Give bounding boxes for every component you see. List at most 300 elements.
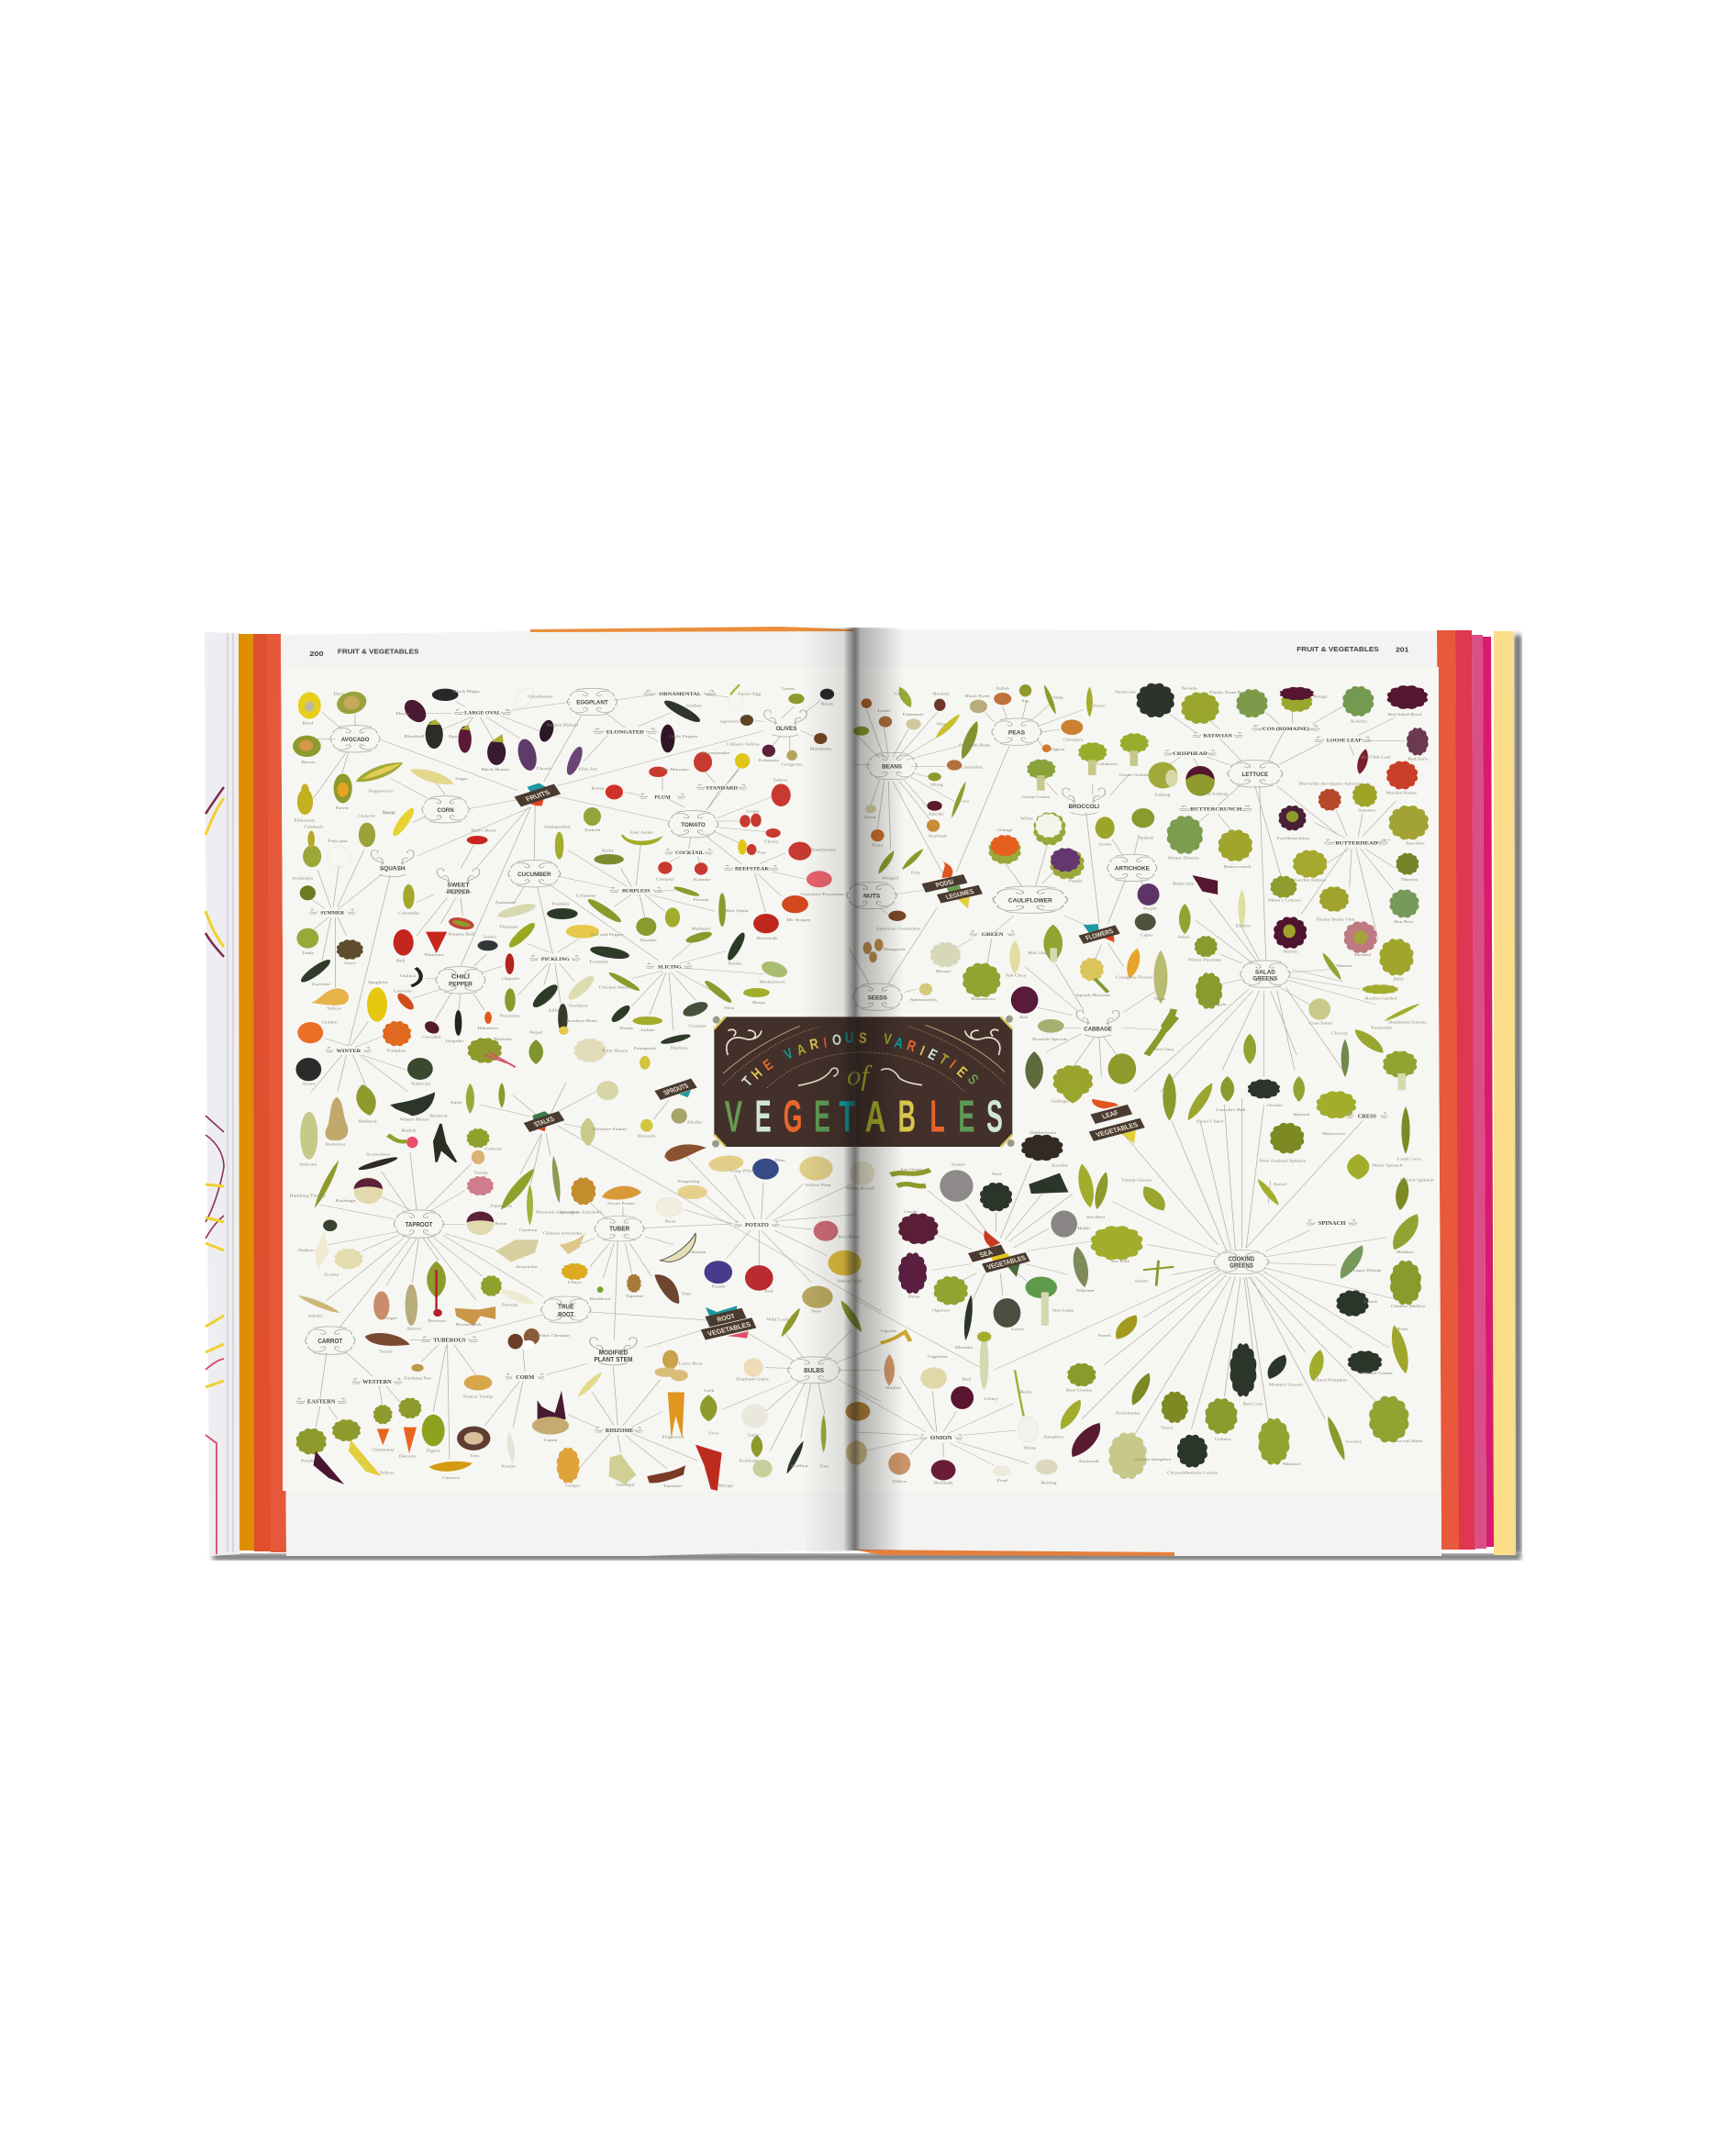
potato group: Yukon Gold xyxy=(836,1280,862,1284)
cucumber group: Armenian xyxy=(495,902,517,906)
open pages xyxy=(281,627,1441,1556)
plaque title: the various varieties: O xyxy=(831,1032,842,1049)
cucumber group: Fountain xyxy=(589,961,608,964)
ribbon: pods and legumes: PODS/ xyxy=(934,878,955,889)
beans group: Cannellini xyxy=(961,766,984,770)
beans group: Edamame xyxy=(903,714,924,717)
sea vegetables group: Ogonori xyxy=(932,1309,951,1313)
corm and rhizome group: Canna xyxy=(544,1439,558,1443)
true root, tuberous and carrot group: Yellow xyxy=(379,1472,395,1475)
ribbon: root vegetables xyxy=(692,1298,760,1347)
taproot group: Celeriac xyxy=(485,1148,504,1151)
plaque title: the various varieties: S xyxy=(858,1030,867,1047)
cooking greens group: Land Cress xyxy=(1397,1158,1421,1161)
eggplant group: Easter Egg xyxy=(738,693,762,696)
true root, tuberous and carrot group: Cassava xyxy=(442,1477,461,1481)
stalks vegetables, upper part: Nopal xyxy=(529,1031,543,1035)
plaque title: the various varieties: V xyxy=(782,1045,796,1063)
sprouts vegetables: Brussels xyxy=(638,1135,656,1139)
potato group: Blue xyxy=(775,1159,786,1163)
tomato group: Campari xyxy=(656,878,674,882)
avocado group: Pinkerton xyxy=(294,819,315,823)
salad greens group: Radicchio xyxy=(1173,883,1195,886)
bulbs group: Garlic xyxy=(747,1434,762,1438)
olives group: Kalamata xyxy=(759,760,780,763)
bulbs group: Scallion xyxy=(791,1464,808,1469)
salad greens group: Endive xyxy=(1236,925,1252,928)
tuber group: Chinese Artichoke xyxy=(543,1232,583,1236)
running header left: FRUIT & VEGETABLES xyxy=(338,648,418,655)
lettuce group: Rouge xyxy=(1314,695,1329,699)
lettuce group: Mythic xyxy=(1283,950,1299,954)
lettuce group xyxy=(1115,683,1429,982)
cooking greens group: COOKING xyxy=(1229,1255,1254,1262)
onion group: White xyxy=(1023,1447,1037,1450)
cooking greens group: Spinach xyxy=(1293,1114,1310,1117)
olives group: OLIVES xyxy=(775,725,797,732)
potato group: New xyxy=(811,1310,821,1314)
tomato group: STANDARD xyxy=(706,784,738,791)
taproot group: Turnip xyxy=(473,1172,488,1175)
cucumber group: Northern xyxy=(569,1005,588,1008)
squash group xyxy=(292,807,530,1092)
lettuce group: Red Oak Leaf xyxy=(1361,756,1391,760)
cooking greens group: CRESS xyxy=(1358,1113,1376,1119)
plaque title: vegetables: E xyxy=(755,1092,772,1141)
lettuce group: Nevada xyxy=(1181,687,1198,691)
peas, nuts and seeds group: Indian xyxy=(996,687,1010,691)
peas, nuts and seeds group: Pigeon xyxy=(1051,749,1065,752)
ribbon: pods and legumes xyxy=(914,856,987,916)
broccoli and cauliflower group: Caper xyxy=(1141,934,1153,938)
lettuce group: BUTTERHEAD xyxy=(1335,839,1377,846)
sea vegetables group: Dulse xyxy=(907,1295,921,1299)
plaque title: the various varieties: I xyxy=(946,1057,959,1072)
cucumber group: Conister xyxy=(689,1025,707,1028)
edible flowers and cabbage group: CABBAGE xyxy=(1084,1026,1112,1032)
potato group xyxy=(656,1144,874,1314)
cucumber group: Alibi xyxy=(548,1009,560,1013)
stalks vegetables, upper part: Palm Hearts xyxy=(602,1050,628,1053)
cucumber group: Marketer xyxy=(692,928,711,931)
tomato group: Yellow xyxy=(773,779,788,783)
corm and rhizome group: Taro xyxy=(470,1454,480,1458)
winter squash continuation: Delicata xyxy=(299,1163,317,1167)
edible flowers and cabbage group: Courgette Flower xyxy=(1116,976,1153,980)
tuber group: Mashua xyxy=(689,1251,707,1255)
olives group: Black xyxy=(821,703,834,706)
tomato group: Lillian's Yellow xyxy=(727,743,761,747)
cucumber group: Pushkin xyxy=(552,903,570,906)
lettuce group: Nanticoke xyxy=(1115,691,1137,695)
sea vegetables group: Mozuku xyxy=(955,1347,974,1350)
sea vegetables group: Nori xyxy=(992,1173,1002,1177)
taproot group: Beetroot xyxy=(428,1320,447,1324)
cucumber group: Marlene xyxy=(671,1047,689,1050)
ribbon: fruits: FRUITS xyxy=(524,788,551,803)
cooking greens group: Swiss Chard xyxy=(1196,1120,1224,1124)
eggplant group: Ichiban xyxy=(686,705,703,708)
peppers group: SWEET xyxy=(448,882,469,888)
stalks vegetables, upper part: Rhubarb xyxy=(494,1039,512,1042)
peppers group: Bull's-Horn xyxy=(471,829,496,833)
cooking greens group: Golden Samphire xyxy=(1134,1458,1172,1462)
plaque title: the various varieties: H xyxy=(749,1065,766,1084)
squash group: Golden xyxy=(322,1021,338,1025)
cooking greens group: Malabar xyxy=(1396,1251,1414,1255)
corm and rhizome group: Ginger xyxy=(565,1484,581,1488)
beans group: Pole xyxy=(911,872,921,875)
salad greens group: Puntarelle xyxy=(1371,1027,1394,1030)
cooking greens group: Sorrel xyxy=(1274,1184,1287,1187)
cucumber group: BURPLESS xyxy=(622,888,651,894)
squash group: Zucchini xyxy=(312,984,331,987)
lettuce group: Flashy Butter Oak xyxy=(1316,918,1355,922)
running header right: 201 xyxy=(1396,646,1408,653)
tomato group: COCKTAIL xyxy=(675,850,705,856)
stalks group: Asparagus xyxy=(490,1205,512,1208)
taproot group: Radish xyxy=(401,1129,417,1133)
taproot group: Arracacha xyxy=(516,1266,538,1270)
plaque title: the various varieties: E xyxy=(761,1057,776,1074)
peppers group: Jalapeño xyxy=(445,1040,464,1044)
avocado group xyxy=(293,688,518,823)
peas, nuts and seeds group: American Groundnut xyxy=(875,928,921,931)
corn group: Sweet xyxy=(383,811,396,815)
avocado group: Bacon xyxy=(302,761,316,765)
edible flowers and cabbage group: Squash Blossom xyxy=(1075,995,1110,998)
corm and rhizome group: Lotus Root xyxy=(679,1362,703,1366)
squash group: Sweet xyxy=(383,812,396,816)
plaque title: the various varieties: E xyxy=(925,1046,940,1064)
stalks vegetables, upper part xyxy=(468,1031,657,1070)
panel: upper left, fruits xyxy=(292,648,845,1092)
tuber group: Ulluco xyxy=(567,1281,583,1284)
cooking greens group: Chrysanthemum Leaves xyxy=(1167,1472,1218,1475)
true root, tuberous and carrot group: WESTERN xyxy=(362,1379,393,1385)
potato group: White Round xyxy=(846,1187,874,1191)
onion group: ONION xyxy=(930,1435,953,1441)
cooking greens group: Mustard Greens xyxy=(1269,1384,1303,1387)
broccoli and cauliflower group: Orange xyxy=(997,829,1013,833)
taproot group: Salsify xyxy=(308,1315,324,1318)
cooking greens group: Ceylon Spinach xyxy=(1400,1179,1434,1183)
taproot group: TAPROOT xyxy=(406,1220,432,1228)
edible flowers and cabbage group: Brussels Sprouts xyxy=(1032,1039,1068,1042)
cooking greens group: Gochoy xyxy=(1345,1440,1363,1444)
cooking greens group: Chinese Mallow xyxy=(1391,1306,1426,1309)
tomato group: Beefsteak xyxy=(757,938,778,941)
onion group: Shallot xyxy=(885,1387,901,1391)
taproot group: Parsnip xyxy=(502,1304,518,1307)
lettuce group: Mottled Butter xyxy=(1386,792,1418,795)
beans group: Adzuki xyxy=(929,813,944,817)
cucumber group: PICKLING xyxy=(541,956,570,962)
plaque title: vegetables: L xyxy=(929,1092,945,1141)
plaque title: vegetables: S xyxy=(986,1092,1003,1141)
plaque title: vegetables: A xyxy=(865,1091,885,1141)
corm and rhizome group: RHIZOME xyxy=(606,1428,634,1434)
peppers group: Banana Bell xyxy=(449,933,475,937)
stalks group: Florence Fennel xyxy=(593,1128,628,1132)
panel: lower left, stalks and root vegetables xyxy=(289,1078,881,1491)
peas, nuts and seeds group: Black Eyed xyxy=(965,695,990,699)
cucumber group: Lebanese xyxy=(576,895,596,898)
corm and rhizome group: Myoga xyxy=(718,1484,734,1488)
winter squash continuation: Hubbard xyxy=(358,1120,377,1124)
broccoli and cauliflower group: Green Goliath xyxy=(1119,774,1150,778)
broccoli and cauliflower group: Spiked xyxy=(1139,837,1153,840)
plaque title: vegetables: G xyxy=(784,1092,802,1141)
beans group: Pinto xyxy=(872,844,884,848)
onion group: Yellow xyxy=(892,1481,907,1484)
panel: upper right, pods, flowers and salad greens xyxy=(847,646,1429,1096)
lettuce group: BUTTERCRUNCH xyxy=(1190,806,1242,812)
running header left xyxy=(309,648,418,658)
cucumber group: Adalaparken xyxy=(544,826,571,829)
taproot group xyxy=(289,1115,544,1331)
plaque title: vegetables: B xyxy=(898,1092,916,1141)
true root, tuberous and carrot group xyxy=(296,1296,707,1484)
cucumber group: East Asian xyxy=(630,831,653,835)
olives group: Mandsaha xyxy=(809,748,832,751)
left page edge stripes xyxy=(239,634,286,1552)
eggplant group: ORNAMENTAL xyxy=(659,691,701,697)
broccoli and cauliflower group: Purple xyxy=(1143,907,1158,911)
stalks vegetables, upper part: Fenugreek xyxy=(634,1048,657,1051)
corm and rhizome group: Fingerroot xyxy=(662,1436,684,1439)
cucumber group: Parades xyxy=(640,939,657,943)
salad greens group: Corn Salad xyxy=(1308,1022,1333,1026)
edible flowers and cabbage group: Tea Choy xyxy=(1154,1049,1174,1052)
lettuce group: Kolchic xyxy=(1351,720,1368,724)
taproot group: Rutabaga xyxy=(336,1200,356,1204)
tuber group: Breadroot xyxy=(590,1297,611,1301)
cucumber group: Chicken Waist xyxy=(599,986,630,990)
onion group: Cipolla xyxy=(881,1329,897,1333)
cucumber group: Burpy xyxy=(752,1002,766,1006)
corm and rhizome group: Water Chestnut xyxy=(538,1334,571,1339)
corm and rhizome group: Galangal xyxy=(616,1484,635,1487)
potato group: Yellow Finn xyxy=(805,1184,831,1188)
corn group: CORN xyxy=(438,806,454,814)
corm and rhizome group: PLANT STEM xyxy=(594,1355,632,1363)
true root, tuberous and carrot group: Prairie Turnip xyxy=(463,1395,494,1399)
peas, nuts and seeds group: Chickpea xyxy=(1063,739,1084,742)
plaque title: the various varieties: E xyxy=(953,1064,970,1082)
ribbon: stalks xyxy=(521,1107,567,1136)
peppers group: Cascabel xyxy=(422,1036,441,1039)
avocado group: Fuerte xyxy=(335,807,350,811)
taproot group: Daikon xyxy=(298,1250,314,1253)
cucumber group: Bourbon Beast xyxy=(566,1020,598,1024)
stalks group: Anise xyxy=(450,1101,463,1106)
tomato group: Moneymaker xyxy=(702,752,730,756)
peppers group: Habanero xyxy=(477,1028,498,1031)
plaque scrollwork xyxy=(727,1029,1000,1085)
avocado group: AVOCADO xyxy=(341,736,370,743)
peppers group: PEPPER xyxy=(447,888,470,895)
sea vegetables group: Wakame xyxy=(1076,1289,1095,1293)
beans group: Lentil xyxy=(878,710,891,714)
lettuce group: BATAVIAN xyxy=(1203,733,1232,739)
cooking greens group: Galluga xyxy=(1052,1100,1069,1104)
sprouts vegetables xyxy=(638,1100,702,1139)
sea vegetables group: Sea Grape xyxy=(1052,1309,1074,1313)
broccoli and cauliflower group: Mosaic xyxy=(936,971,952,974)
broccoli and cauliflower group: CAULIFLOWER xyxy=(1008,897,1052,904)
tomato group: Cherry xyxy=(764,840,779,844)
cooking greens group: Watercress xyxy=(1322,1132,1345,1136)
plaque corner ornaments xyxy=(712,1016,1015,1148)
broccoli and cauliflower group: Green Comet xyxy=(1022,796,1051,800)
lettuce group: CRISPHEAD xyxy=(1173,750,1208,757)
peppers group: PEPPER xyxy=(449,981,473,987)
beans group: Borlotti xyxy=(933,693,950,696)
ribbon: sprouts xyxy=(654,1078,701,1106)
squash group: SQUASH xyxy=(380,865,406,872)
cucumber group: Kirby xyxy=(602,850,615,853)
plaque title: the various varieties: V xyxy=(883,1031,893,1049)
sea vegetables group: Arame xyxy=(951,1163,966,1167)
right page edge stripes xyxy=(1437,630,1516,1555)
true root, tuberous and carrot group: TRUE xyxy=(558,1303,574,1310)
bulbs group: BULBS xyxy=(804,1366,824,1374)
lettuce group: Iceberg xyxy=(1154,794,1171,797)
eggplant group: Slim Jim xyxy=(578,768,597,772)
onion group: Celery xyxy=(985,1398,998,1402)
bulbs group: Kohlrabi xyxy=(740,1460,759,1463)
squash group: Patty pan xyxy=(328,840,348,844)
peas, nuts and seeds group xyxy=(847,684,1106,1010)
ribbon: sea vegetables xyxy=(960,1223,1035,1285)
tomato group: Kumato xyxy=(694,879,711,883)
cucumber group: Persian xyxy=(694,899,709,903)
cooking greens group: Komatsuna xyxy=(1116,1412,1141,1416)
winter squash continuation: Winter Melon xyxy=(400,1118,429,1122)
cooking greens group: New Zealand Spinach xyxy=(1260,1160,1307,1163)
eggplant group: Ghostbuster xyxy=(528,695,553,699)
book spine shadow xyxy=(800,628,904,1554)
squash group: Tinda xyxy=(302,952,315,956)
squash group: Yellow xyxy=(327,1007,342,1011)
sea vegetables group: Dabberlocks xyxy=(1029,1132,1056,1136)
cooking greens group: Water Spinach xyxy=(1372,1164,1403,1168)
beans group xyxy=(853,685,991,881)
olives group: Agrinion xyxy=(719,720,740,724)
tuber group: Tigernut xyxy=(626,1295,644,1299)
cucumber group: Diamant xyxy=(500,926,518,929)
taproot group: Beets xyxy=(495,1223,506,1227)
cucumber group: Tronchi xyxy=(584,829,601,833)
corn group xyxy=(351,758,518,838)
peppers group: Pimiento xyxy=(425,954,444,958)
squash group: SUMMER xyxy=(320,909,345,916)
peppers group: Cayenne xyxy=(394,990,413,994)
tomato group: Mr. Stripey xyxy=(786,919,811,923)
olives group: Green xyxy=(782,688,795,692)
beans group: Soybean xyxy=(929,835,947,839)
avocado group: Reed xyxy=(302,722,314,726)
cucumber group: Marketmore xyxy=(759,981,786,984)
cucumber group: Wautoma xyxy=(500,1015,520,1018)
cooking greens group: Broccoli Rabe xyxy=(1392,1439,1423,1444)
broccoli and cauliflower group: Calabrese xyxy=(1096,763,1118,767)
cooking greens group: Sorrel xyxy=(1135,1280,1149,1284)
eggplant group: Ebony xyxy=(395,713,410,717)
stalks group xyxy=(450,1081,881,1311)
corm and rhizome group: Konjac xyxy=(501,1465,518,1469)
cucumber group: Salt and Pepper xyxy=(591,934,624,938)
eggplant group: EGGPLANT xyxy=(576,699,608,706)
cooking greens group: Turnip Greens xyxy=(1121,1179,1152,1183)
squash group: WINTER xyxy=(336,1048,362,1054)
ribbon: flowers xyxy=(1074,917,1124,950)
cooking greens group xyxy=(994,1073,1434,1479)
cooking greens group: Celtuce xyxy=(1215,1438,1232,1441)
onion group: Red xyxy=(963,1378,972,1382)
beans group: Winged xyxy=(882,877,899,881)
bulbs group: Wild Leek xyxy=(766,1318,789,1322)
eggplant group: Black Magic xyxy=(453,691,481,695)
lettuce group: Red Sails xyxy=(1408,758,1428,761)
onion group: Cippolini xyxy=(928,1355,948,1359)
ribbon: stalks: STALKS xyxy=(532,1115,556,1128)
plaque title: the various varieties: R xyxy=(808,1036,820,1054)
plaque title: the various varieties: U xyxy=(845,1030,853,1047)
peppers group: Jimbo xyxy=(483,936,496,939)
onion group: Boiler xyxy=(1019,1391,1033,1395)
plaque title: the various varieties: I xyxy=(918,1043,927,1060)
peppers group: Bell xyxy=(396,960,406,963)
sea vegetables group: Sea Grape xyxy=(900,1169,923,1172)
tomato group: TOMATO xyxy=(681,821,706,828)
edible flowers and cabbage group: Napa xyxy=(1154,998,1166,1002)
squash group: Chayote xyxy=(358,815,376,818)
tomato group: Costoluto Fiorentino xyxy=(800,894,845,897)
eggplant group: Epic xyxy=(449,736,459,739)
peppers group: Chilaca xyxy=(400,975,417,979)
eggplant group: ELONGATED xyxy=(607,728,644,735)
potato group: Rose xyxy=(665,1220,676,1224)
plaque title: the various varieties: A xyxy=(795,1041,808,1060)
corm and rhizome group xyxy=(457,1328,734,1491)
beans group: BEANS xyxy=(882,763,902,770)
ribbon: root vegetables: VEGETABLES xyxy=(707,1320,752,1338)
cooking greens group: Lagos Bologi xyxy=(1352,1270,1382,1273)
edible flowers and cabbage group xyxy=(1006,925,1179,1096)
cooking greens group: Collard Greens xyxy=(1361,1372,1393,1375)
cooking greens group: Poke xyxy=(1397,1328,1409,1332)
salad greens group xyxy=(1134,875,1427,1092)
edible flowers and cabbage group: Bok Choy xyxy=(1028,952,1050,956)
potato group: Red Bliss xyxy=(839,1236,859,1239)
plaque title: the various varieties: I xyxy=(822,1035,828,1051)
true root, tuberous and carrot group: TUBEROUS xyxy=(433,1338,466,1343)
lettuce group: Bibb xyxy=(1394,978,1404,982)
peas, nuts and seeds group: Snap xyxy=(1052,696,1063,700)
cucumber group: SLICING xyxy=(658,963,682,970)
olives group: Cerignola xyxy=(781,763,803,767)
lettuce group: Garden Babies xyxy=(1295,879,1326,883)
bulbs group xyxy=(700,1299,881,1477)
eggplant group xyxy=(395,684,762,782)
ribbon: sea vegetables: VEGETABLES xyxy=(985,1254,1027,1271)
tuber group: Sweet Potato xyxy=(607,1202,636,1206)
sprouts vegetables: Alfalfa xyxy=(686,1121,702,1125)
beans group: Great xyxy=(864,817,876,820)
taproot group: Jicama xyxy=(324,1273,339,1277)
